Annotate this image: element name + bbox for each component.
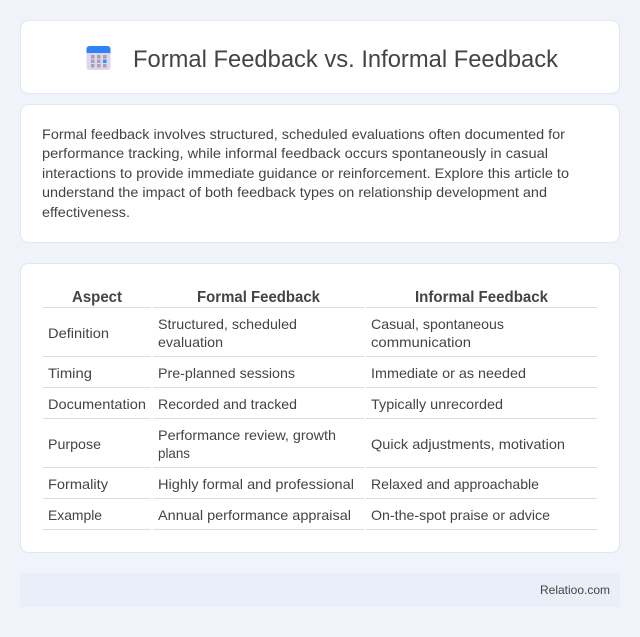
table row: purpose: plans — [158, 445, 190, 461]
text block: introduction paragraph: understand the impact of both feedback types on relationship development and — [42, 184, 547, 200]
table header row: Informal Feedback — [415, 289, 548, 306]
footer text: Relatioo.com — [540, 583, 610, 597]
table row: definition: Definition — [48, 325, 109, 341]
text block: introduction paragraph — [42, 126, 569, 220]
table row: definition — [48, 316, 504, 350]
table row: example: Annual performance appraisal — [158, 507, 351, 523]
table row: timing: Immediate or as needed — [371, 365, 526, 381]
panel: introduction — [20, 104, 620, 242]
table row: purpose: Quick adjustments, motivation — [371, 436, 565, 452]
table row: example: On-the-spot praise or advice — [371, 507, 550, 523]
text block: introduction paragraph: Formal feedback involves structured, scheduled evaluations often documented for — [42, 126, 565, 142]
table row: timing — [48, 365, 526, 381]
panel: comparison table — [20, 264, 620, 552]
text block: introduction paragraph: interactions to provide immediate guidance or reinforcement. Explore this article to — [42, 165, 569, 181]
text block: introduction paragraph: performance tracking, while informal feedback occurs spontaneously in casual — [42, 145, 548, 161]
table row: formality — [48, 476, 539, 492]
table row: formality: Highly formal and professional — [158, 476, 354, 492]
table row: definition: Structured, scheduled — [158, 316, 297, 332]
table row: definition: communication — [371, 334, 471, 350]
footer bar — [20, 573, 620, 607]
table header row: Formal Feedback — [197, 289, 320, 306]
table row: example — [48, 507, 550, 523]
title: Formal Feedback vs. Informal Feedback — [133, 46, 559, 73]
table row: documentation: Recorded and tracked — [158, 396, 297, 412]
table row: purpose: Performance review, growth — [158, 427, 336, 443]
table row: purpose: Purpose — [48, 436, 101, 452]
table row: definition: evaluation — [158, 334, 223, 350]
table row: purpose — [48, 427, 565, 461]
table header row — [72, 289, 548, 306]
table row: timing: Pre-planned sessions — [158, 365, 295, 381]
panel: title header — [20, 20, 620, 94]
table row: documentation: Typically unrecorded — [371, 396, 503, 412]
table row: example: Example — [48, 507, 102, 523]
table row: documentation — [48, 396, 503, 412]
table row: formality: Relaxed and approachable — [371, 476, 539, 492]
table header row: Aspect — [72, 289, 123, 306]
table row: formality: Formality — [48, 476, 108, 492]
table row: timing: Timing — [48, 365, 92, 381]
table row: definition: Casual, spontaneous — [371, 316, 504, 332]
table row: documentation: Documentation — [48, 396, 146, 412]
icon: calendar — [86, 46, 110, 70]
text block: introduction paragraph: effectiveness. — [42, 204, 130, 220]
